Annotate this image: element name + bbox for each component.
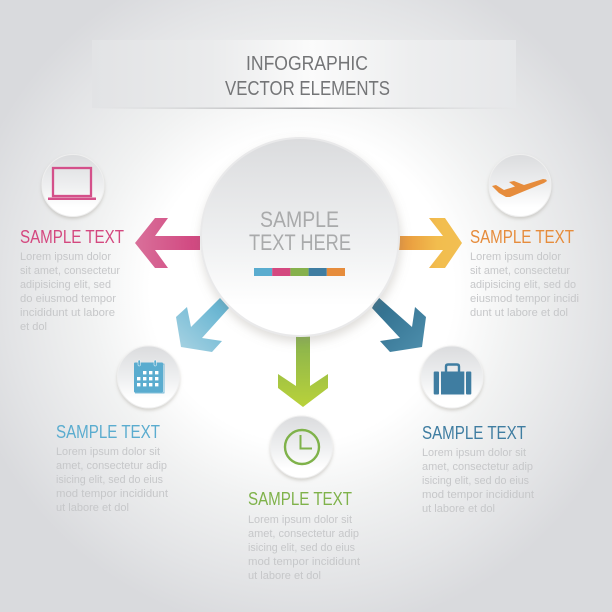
central heading [249,207,351,255]
body: laptop: Lorem ipsum dolor [20,251,111,263]
body: laptop: adipisicing elit, sed [20,279,111,291]
title banner [92,40,516,109]
central circle [200,137,400,337]
title text: INFOGRAPHIC [246,53,368,75]
body: plane: Lorem ipsum dolor [470,251,561,263]
title text [225,53,390,100]
central heading: TEXT HERE [249,230,351,255]
heading: briefcase: SAMPLE TEXT [422,423,526,443]
body: plane: adipisicing elit, sed do [470,279,576,291]
heading: laptop: SAMPLE TEXT [20,227,124,247]
icon: clock [270,416,332,478]
body: calendar: ut labore et dol [56,502,129,514]
body: calendar [56,446,168,514]
body: clock [248,514,360,582]
body: calendar: isicing elit, sed do eius [56,474,163,486]
arrow: down green [278,335,328,407]
body: laptop: do eiusmod tempor [20,293,116,305]
heading: clock: SAMPLE TEXT [248,489,352,509]
title text: VECTOR ELEMENTS [225,78,390,100]
panel: laptop [20,154,124,333]
body: laptop: sit amet, consectetur [20,265,120,277]
heading: calendar: SAMPLE TEXT [56,422,160,442]
arrow: right orange [399,218,462,268]
heading: plane: SAMPLE TEXT [470,227,574,247]
body: plane: sit amet, consectetur [470,265,570,277]
icon: calendar [118,346,180,408]
body: clock: isicing elit, sed do eius [248,542,355,554]
body: laptop: et dol [20,321,47,333]
colour bar [254,268,345,276]
body: clock: ut labore et dol [248,570,321,582]
panel: briefcase [421,346,534,515]
body: briefcase: mod tempor incididunt [422,489,534,501]
icon: laptop [42,154,104,216]
body: briefcase: ut labore et dol [422,503,495,515]
central heading: SAMPLE [260,207,339,232]
body: briefcase: amet, consectetur adip [422,461,533,473]
body: briefcase: isicing elit, sed do eius [422,475,529,487]
body: plane: dunt ut labore et dol [470,307,568,319]
arrow: left pink [135,218,200,268]
panel: clock [248,416,360,582]
panel: calendar [56,346,180,514]
arrow: down-right dark blue [372,297,426,352]
panel: plane [470,154,579,319]
body: laptop: incididunt ut labore [20,307,115,319]
body: calendar: amet, consectetur adip [56,460,167,472]
body: laptop [20,251,120,333]
body: clock: amet, consectetur adip [248,528,359,540]
body: briefcase [422,447,534,515]
icon: briefcase [421,346,483,408]
arrow: down-left blue [176,298,229,352]
body: briefcase: Lorem ipsum dolor sit [422,447,526,459]
icon: plane [489,154,551,216]
body: plane: eiusmod tempor incidi [470,293,579,305]
body: calendar: Lorem ipsum dolor sit [56,446,160,458]
body: calendar: mod tempor incididunt [56,488,168,500]
body: plane [470,251,579,319]
body: clock: Lorem ipsum dolor sit [248,514,352,526]
body: clock: mod tempor incididunt [248,556,360,568]
